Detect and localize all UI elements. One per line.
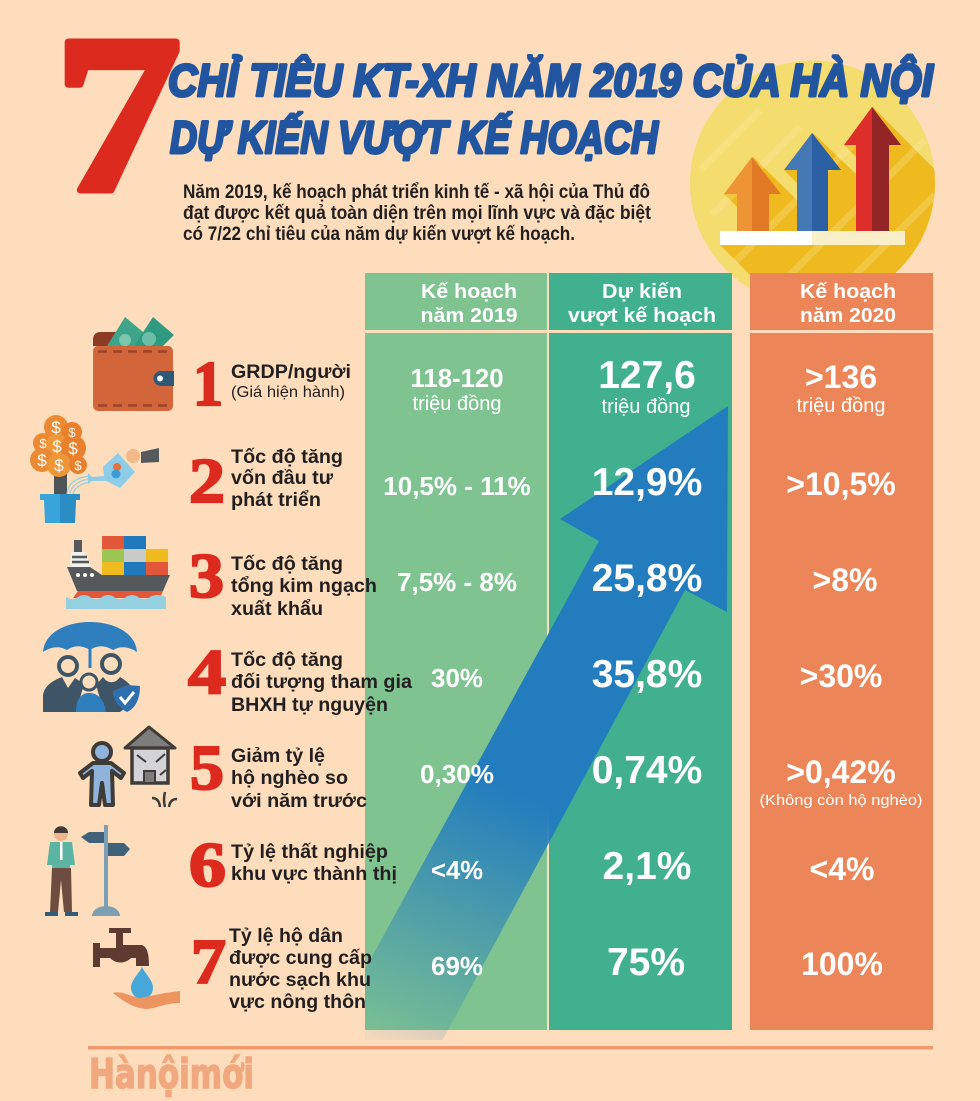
row 7: clean water <box>93 925 372 1013</box>
label: poverty reduction: với năm trước <box>231 790 367 812</box>
values: expected exceed: 12,9% <box>592 461 702 504</box>
icon: money tree with watering can: $ <box>68 425 76 440</box>
intro paragraph: Năm 2019, kế hoạch phát triển kinh tế - xã hội của Thủ đô <box>183 182 650 203</box>
values: expected exceed: 127,6 <box>598 354 696 397</box>
values: expected exceed: triệu đồng <box>602 396 690 418</box>
values: plan 2019: triệu đồng <box>413 393 501 415</box>
row 1: GRDP per capita <box>93 317 351 419</box>
row 2: investment growth <box>30 415 343 523</box>
logo: Hà Nội Mới: Hànộimới <box>89 1050 254 1098</box>
label: social insurance: Tốc độ tăng <box>231 649 343 671</box>
values: plan 2019: 10,5% - 11% <box>383 471 531 501</box>
icon: tap, droplet and hand <box>93 928 180 1009</box>
panel: expected exceed <box>549 273 732 1030</box>
icon: wallet <box>93 317 174 411</box>
values: plan 2020: >30% <box>800 658 882 694</box>
values: plan 2020: >0,42% <box>786 754 896 790</box>
label: clean water: vực nông thôn <box>229 991 366 1013</box>
label: export growth: Tốc độ tăng <box>231 553 343 575</box>
icon: family under umbrella <box>43 622 140 712</box>
numeral 3: 3 <box>189 540 224 611</box>
icon: money tree with watering can: $ <box>37 451 47 470</box>
values: plan 2019: 0,30% <box>420 759 494 789</box>
label: export growth: xuất khẩu <box>231 598 323 620</box>
label: clean water: được cung cấp <box>229 947 372 969</box>
column headers: Kế hoạch <box>421 280 517 303</box>
values: expected exceed: 0,74% <box>592 749 702 792</box>
values: plan 2020: 100% <box>801 946 883 982</box>
values: plan 2019 <box>383 363 531 981</box>
label: investment growth <box>231 446 343 511</box>
values: plan 2019: 7,5% - 8% <box>397 567 517 597</box>
icon: person and damaged house <box>80 727 177 807</box>
icon: money tree with watering can: $ <box>54 456 64 475</box>
label: investment growth: vốn đầu tư <box>231 467 334 489</box>
values: plan 2020: >10,5% <box>786 466 896 502</box>
icon: money tree with watering can: $ <box>68 439 78 458</box>
label: investment growth: Tốc độ tăng <box>231 446 343 468</box>
intro paragraph: có 7/22 chỉ tiêu của năm dự kiến vượt kế hoạch. <box>183 224 575 245</box>
label: clean water <box>229 925 372 1013</box>
values: plan 2020 <box>760 359 922 982</box>
label: social insurance: BHXH tự nguyện <box>231 694 388 716</box>
values: expected exceed: 35,8% <box>592 653 702 696</box>
label: poverty reduction: hộ nghèo so <box>231 767 348 789</box>
numeral 1: 1 <box>193 348 223 419</box>
panel: plan 2019 <box>365 273 547 1030</box>
values: plan 2020: triệu đồng <box>797 395 885 417</box>
column headers: vượt kế hoạch <box>568 304 716 327</box>
column headers: năm 2019 <box>420 304 518 327</box>
big blue rising arrow <box>365 406 728 1040</box>
icon: rising arrows in yellow circle <box>690 60 935 288</box>
values: expected exceed: 75% <box>607 941 685 984</box>
column headers: Dự kiến <box>602 280 682 303</box>
label: social insurance: đối tượng tham gia <box>231 671 412 693</box>
intro paragraph: đạt được kết quả toàn diện trên mọi lĩnh vực và đặc biệt <box>183 203 652 224</box>
icon: money tree with watering can: $ <box>39 436 47 451</box>
values: expected exceed: 2,1% <box>603 845 691 888</box>
label: unemployment: khu vực thành thị <box>231 863 397 885</box>
values: expected exceed: 25,8% <box>592 557 702 600</box>
values: plan 2019: 118-120 <box>410 363 504 393</box>
label: clean water: nước sạch khu <box>229 969 371 991</box>
column headers: năm 2020 <box>800 304 896 327</box>
title <box>168 55 934 163</box>
row 6: urban unemployment <box>45 825 397 916</box>
label: unemployment: Tỷ lệ thất nghiệp <box>231 841 388 863</box>
numeral 5: 5 <box>190 732 224 803</box>
numeral 6: 6 <box>189 829 226 900</box>
label: investment growth: phát triển <box>231 489 321 511</box>
values: plan 2019: 30% <box>431 663 483 693</box>
panel: plan 2020 <box>750 273 933 1030</box>
row 3: export growth <box>66 536 377 620</box>
numeral 2: 2 <box>189 445 225 516</box>
icon: money tree with watering can: $ <box>74 458 82 473</box>
label: GRDP <box>231 361 351 401</box>
label: social insurance <box>231 649 412 716</box>
values: plan 2020: >8% <box>813 562 877 598</box>
icon: money tree with watering can <box>30 415 159 523</box>
icon: man and signpost <box>45 825 130 916</box>
values: plan 2020: <4% <box>810 851 874 887</box>
label: poverty reduction: Giảm tỷ lệ <box>231 745 325 767</box>
label: clean water: Tỷ lệ hộ dân <box>229 925 343 947</box>
icon: money tree with watering can: $ <box>52 437 62 456</box>
values: plan 2019: <4% <box>431 855 483 885</box>
column headers <box>420 280 896 327</box>
row 5: poverty reduction <box>80 727 367 812</box>
numeral 7: 7 <box>191 926 226 997</box>
column headers: Kế hoạch <box>800 280 896 303</box>
values: plan 2020: (Không còn hộ nghèo) <box>760 792 922 809</box>
icon: container ship <box>66 536 170 609</box>
label: export growth: tổng kim ngạch <box>231 575 377 597</box>
title: DỰ KIẾN VƯỢT KẾ HOẠCH <box>170 112 659 163</box>
numeral 4: 4 <box>188 636 226 707</box>
intro paragraph <box>183 182 652 245</box>
values: plan 2019: 69% <box>431 951 483 981</box>
row 4: voluntary social insurance <box>43 622 412 716</box>
icon: money tree with watering can: $ <box>51 418 61 437</box>
values: plan 2020: >136 <box>805 359 877 395</box>
values: expected exceed <box>592 354 702 984</box>
label: poverty reduction <box>231 745 367 812</box>
label: unemployment <box>231 841 397 885</box>
label: export growth <box>231 553 377 620</box>
label: GRDP: GRDP/người <box>231 361 351 383</box>
label: GRDP: (Giá hiện hành) <box>231 384 345 401</box>
